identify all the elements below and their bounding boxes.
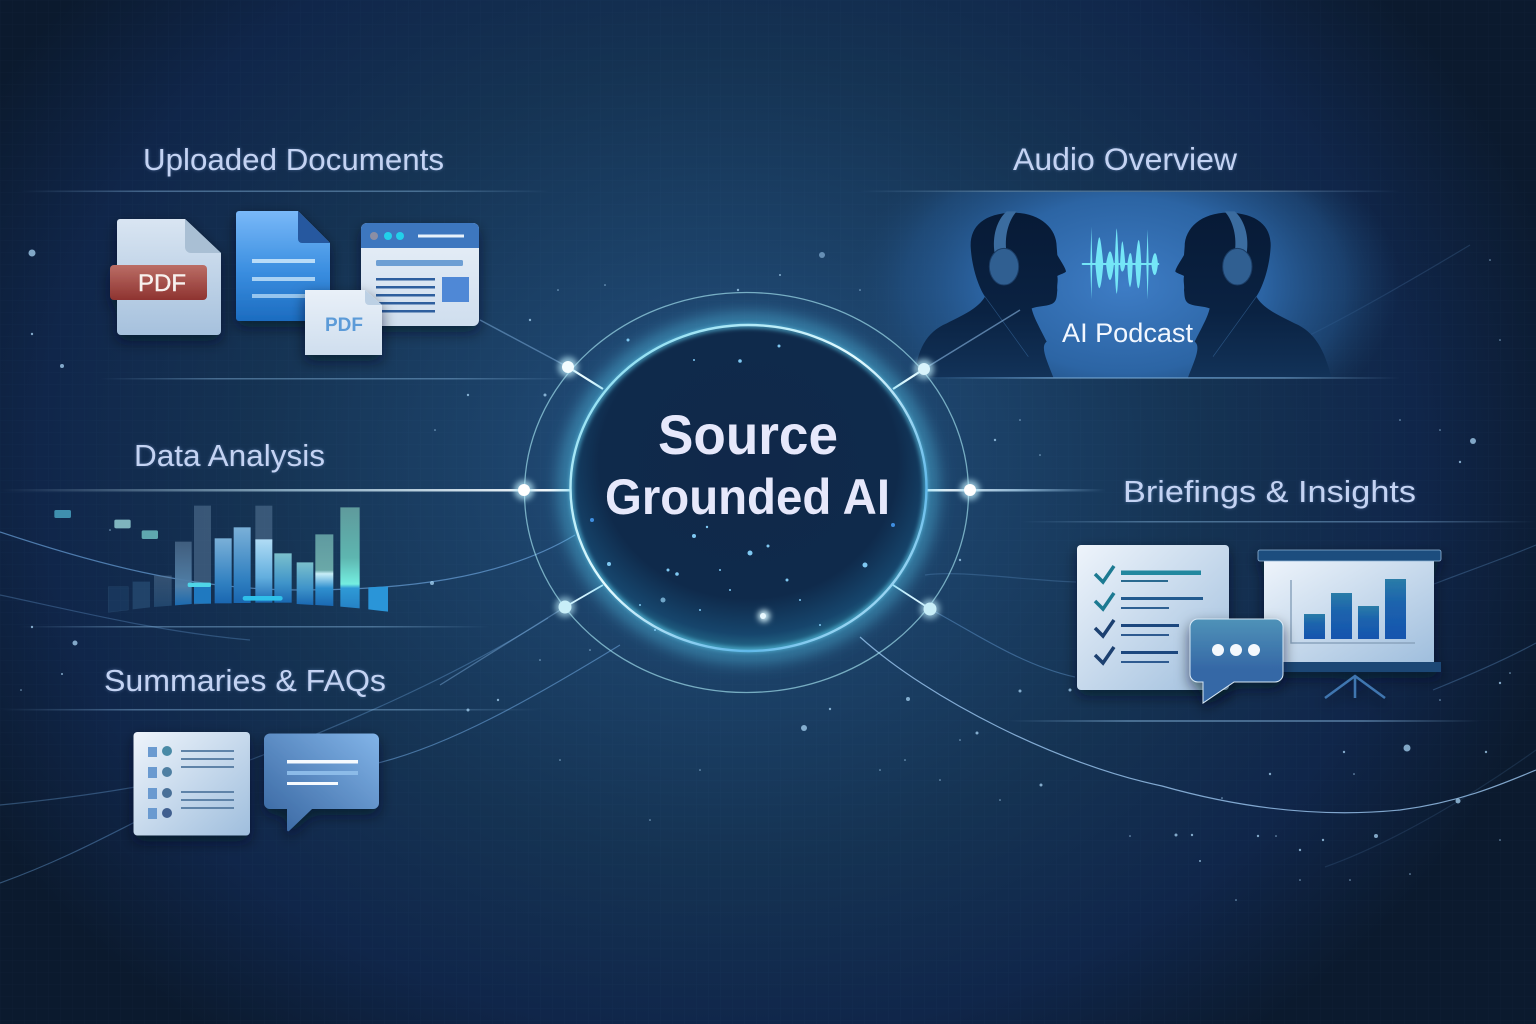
icon: left listener silhouette with headphones bbox=[915, 211, 1066, 377]
icon: PDF file with red label: PDF bbox=[138, 270, 186, 297]
heading: audio overview: Audio Overview bbox=[1013, 141, 1237, 177]
heading: uploaded documents: Uploaded Documents bbox=[143, 142, 444, 177]
podcast glow backdrop bbox=[886, 192, 1380, 378]
panel: uploaded documents bbox=[110, 142, 479, 355]
icon: speech bubble with dots bbox=[1190, 619, 1283, 703]
connection nodes bbox=[514, 357, 980, 619]
heading: briefings and insights: Briefings & Insights bbox=[1123, 474, 1416, 509]
icon: small PDF file bbox=[305, 290, 382, 355]
title: Source Grounded AI: Source bbox=[658, 403, 838, 466]
heading: data analysis: Data Analysis bbox=[134, 438, 325, 473]
connector curves bbox=[0, 245, 1536, 883]
bar chart bbox=[54, 506, 388, 612]
panel: audio overview bbox=[886, 146, 1386, 379]
glowing core ring bbox=[568, 322, 930, 654]
outer orbit ring bbox=[524, 292, 968, 692]
icon: summary speech bubble bbox=[264, 734, 379, 831]
stars bbox=[20, 250, 1511, 901]
icon: summary list document bbox=[134, 732, 250, 836]
central hub diagram bbox=[0, 292, 1106, 692]
icon: right listener silhouette with headphones bbox=[1175, 211, 1331, 377]
icon: audio waveform bbox=[1082, 227, 1159, 299]
panel: data analysis bbox=[54, 438, 388, 612]
section divider lines bbox=[0, 190, 1536, 722]
icon: blue document bbox=[236, 211, 330, 321]
icon: browser window bbox=[361, 223, 479, 326]
podcast baseline glow line bbox=[930, 377, 1400, 379]
icon: checklist document bbox=[1077, 545, 1229, 690]
heading: summaries and FAQs: Summaries & FAQs bbox=[104, 663, 386, 698]
title: Source Grounded AI: Grounded AI bbox=[605, 469, 890, 525]
core inner stars bbox=[590, 338, 895, 631]
connector spokes bbox=[0, 310, 1106, 685]
panel: briefings and insights bbox=[1077, 474, 1441, 703]
icon: PDF file with red label bbox=[110, 219, 221, 335]
panel: summaries and FAQs bbox=[104, 663, 386, 836]
icon: small PDF file: PDF bbox=[325, 315, 363, 336]
title: Source Grounded AI bbox=[605, 403, 890, 525]
icon: presentation screen with bar chart bbox=[1258, 550, 1441, 698]
label: AI Podcast: AI Podcast bbox=[1062, 318, 1193, 348]
